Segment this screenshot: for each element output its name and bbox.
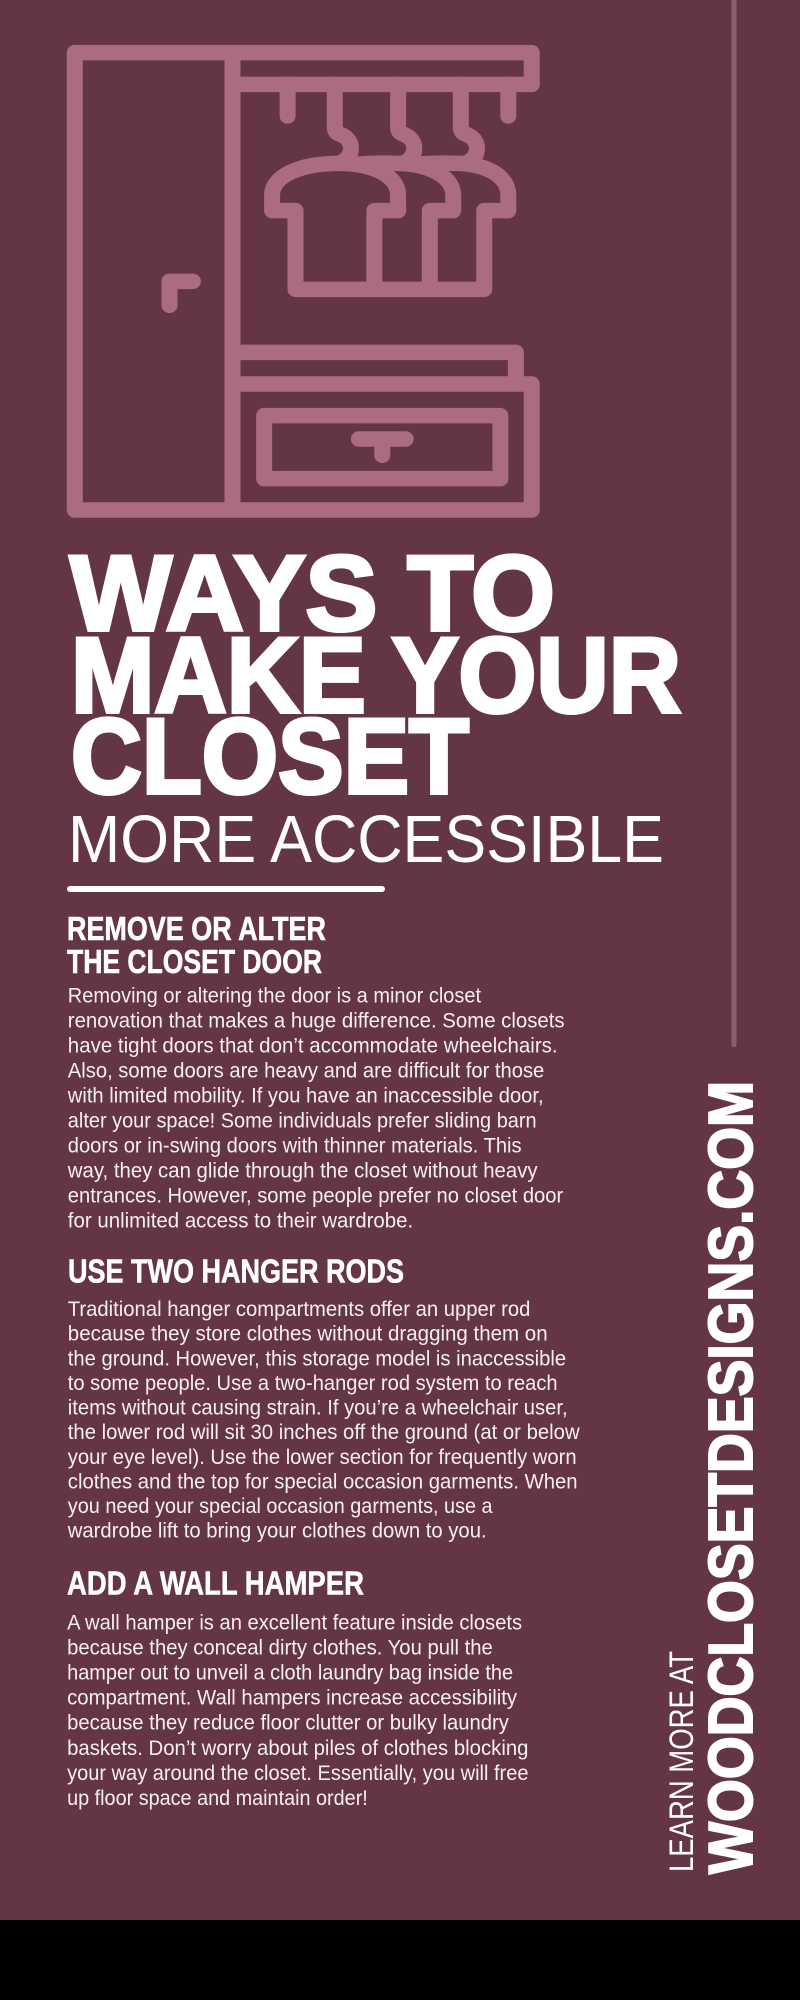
heading: remove or alter the closet door: THE CLOSET DOOR: [67, 943, 322, 980]
body text: door: [67, 984, 565, 1233]
body text: hanger rods: the ground. However, this storage model is inaccessible: [68, 1346, 566, 1370]
body text: wall hamper: because they conceal dirty clothes. You pull the: [67, 1635, 493, 1659]
title: [68, 533, 681, 877]
title: MORE ACCESSIBLE: [68, 802, 664, 877]
body text: door: with limited mobility. If you have an inaccessible door,: [67, 1084, 544, 1108]
body text: door: entrances. However, some people prefer no closet door: [68, 1184, 563, 1208]
heading: use two hanger rods: USE TWO HANGER RODS: [68, 1253, 404, 1290]
title: MAKE YOUR: [71, 615, 681, 735]
body text: wall hamper: A wall hamper is an excellent feature inside closets: [67, 1610, 522, 1634]
body text: wall hamper: up floor space and maintain order!: [67, 1786, 368, 1810]
body text: wall hamper: your way around the closet. Essentially, you will free: [67, 1761, 528, 1785]
heading: remove or alter the closet door: REMOVE OR ALTER: [67, 910, 326, 947]
body text: door: have tight doors that don’t accommodate wheelchairs.: [68, 1034, 558, 1058]
body text: hanger rods: the lower rod will sit 30 inches off the ground (at or below: [68, 1420, 580, 1444]
icon: wardrobe with hanging shirts: [75, 53, 532, 510]
body text: hanger rods: Traditional hanger compartments offer an upper rod: [68, 1297, 530, 1321]
body text: hanger rods: clothes and the top for special occasion garments. When: [68, 1469, 578, 1493]
body text: wall hamper: compartment. Wall hampers increase accessibility: [67, 1686, 517, 1710]
heading: add a wall hamper: ADD A WALL HAMPER: [67, 1564, 364, 1601]
vertical sidebar line: [732, 0, 736, 1047]
body text: hanger rods: your eye level). Use the lower section for frequently worn: [68, 1445, 577, 1469]
title underline: [67, 886, 385, 892]
body text: door: Removing or altering the door is a minor closet: [68, 984, 481, 1008]
section: use two hanger rods: [67, 1253, 580, 1543]
body text: hanger rods: you need your special occasion garments, use a: [68, 1494, 493, 1518]
vertical call to action: WOODCLOSETDESIGNS.COM: [697, 1081, 766, 1874]
body text: door: doors or in-swing doors with thinner materials. This: [68, 1134, 522, 1158]
body text: door: Also, some doors are heavy and are difficult for those: [68, 1059, 544, 1083]
heading: remove or alter the closet door: [67, 910, 326, 980]
body text: hanger rods: [67, 1297, 580, 1543]
title: WAYS TO: [70, 533, 555, 653]
body text: wall hamper: baskets. Don’t worry about piles of clothes blocking: [67, 1736, 528, 1760]
body text: hanger rods: wardrobe lift to bring your clothes down to you.: [67, 1519, 487, 1543]
body text: hanger rods: to some people. Use a two-hanger rod system to reach: [68, 1371, 558, 1395]
black footer band: [0, 1920, 800, 2000]
section: remove or alter the closet door: [67, 910, 565, 1233]
body text: wall hamper: because they reduce floor clutter or bulky laundry: [67, 1711, 509, 1735]
body text: door: alter your space! Some individuals prefer sliding barn: [68, 1109, 537, 1133]
body text: wall hamper: [67, 1610, 528, 1810]
body text: door: renovation that makes a huge difference. Some closets: [68, 1009, 565, 1033]
vertical call to action: [663, 1081, 766, 1874]
body text: wall hamper: hamper out to unveil a cloth laundry bag inside the: [67, 1660, 513, 1684]
title: CLOSET: [71, 696, 469, 816]
body text: door: for unlimited access to their wardrobe.: [68, 1209, 413, 1233]
section: add a wall hamper: [67, 1564, 528, 1810]
body text: hanger rods: items without causing strain. If you’re a wheelchair user,: [68, 1396, 568, 1420]
body text: door: way, they can glide through the closet without heavy: [67, 1159, 538, 1183]
body text: hanger rods: because they store clothes without dragging them on: [68, 1322, 548, 1346]
vertical call to action: LEARN MORE AT: [663, 1651, 701, 1872]
